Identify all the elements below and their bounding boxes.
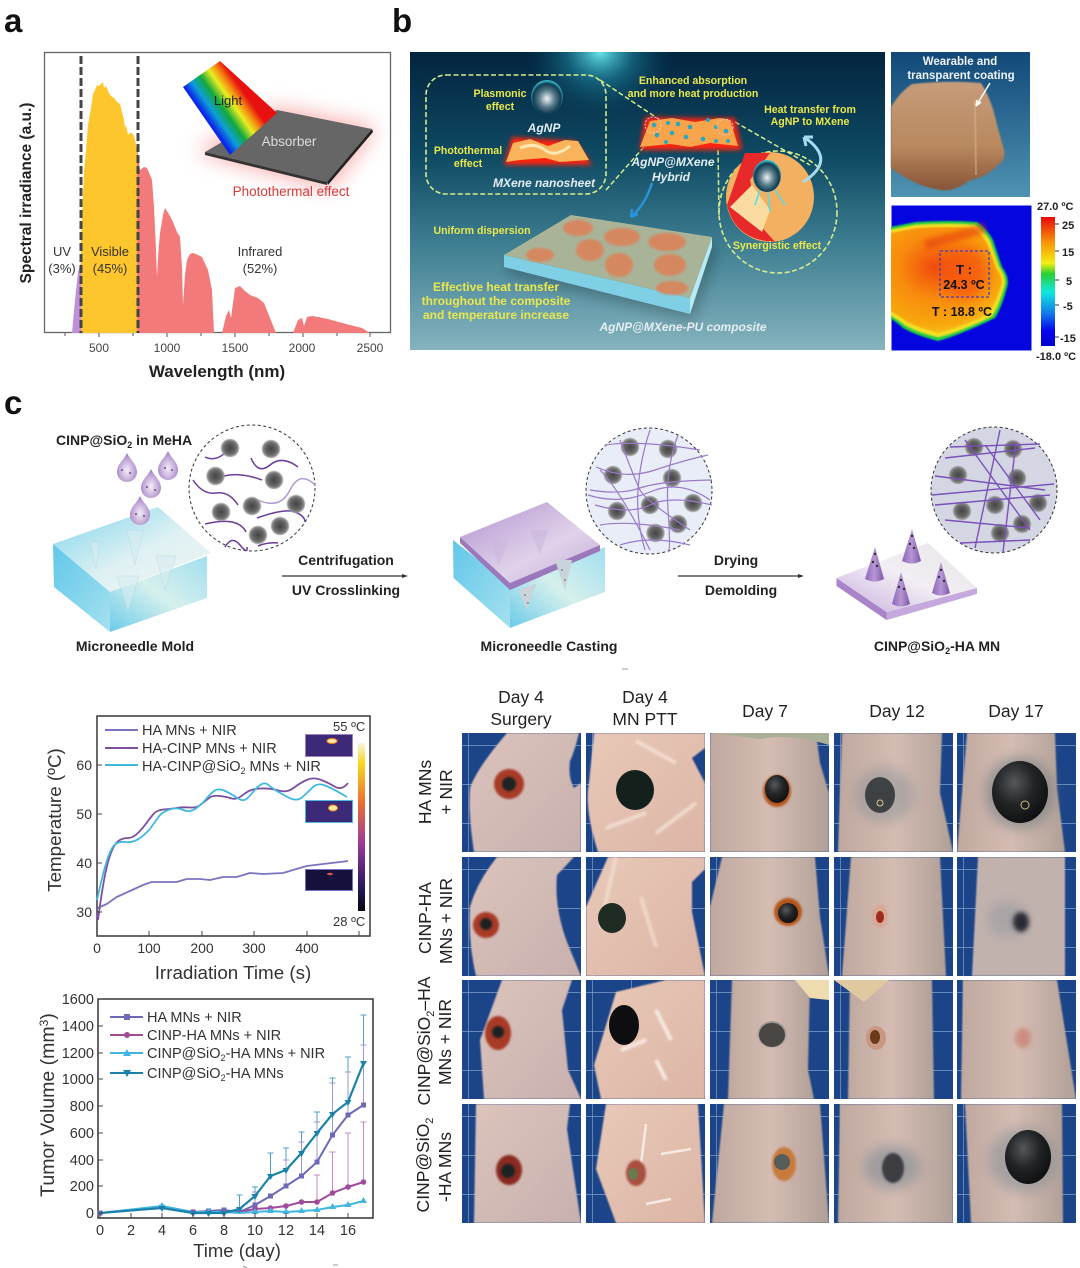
label: Microneedle Casting: Microneedle Casting xyxy=(481,638,617,654)
axis ticks: 2 xyxy=(127,1223,135,1239)
photo: wearable coating on hand xyxy=(891,52,1030,197)
legend: MNs + NIR xyxy=(246,759,321,775)
x axis ticks and labels xyxy=(65,333,384,355)
legend: 2 xyxy=(241,766,246,776)
photo: row 3, MN PTT xyxy=(586,980,705,1099)
axis ticks: 40 xyxy=(76,855,92,871)
composite slab xyxy=(504,215,716,322)
thermal colorbar: 27.0 ºC xyxy=(1037,201,1073,213)
x axis ticks and labels: 2500 xyxy=(357,341,384,355)
arrow: centrifugation: Centrifugation xyxy=(298,552,394,568)
annotation text: Heat transfer from xyxy=(764,104,856,116)
photo: row 4, day 7 xyxy=(710,1104,829,1223)
dashed wavelength boundaries xyxy=(81,56,138,333)
label: Microneedle Mold: Microneedle Mold xyxy=(76,638,194,654)
inset colorbar xyxy=(358,743,365,911)
photo: row 4, day 17 xyxy=(957,1104,1076,1223)
axis ticks: 50 xyxy=(76,806,92,822)
HA-CINP MNs curve xyxy=(97,778,348,920)
axis ticks: 800 xyxy=(70,1099,94,1115)
label: CINP@SiO2-HA MN: 2 xyxy=(945,646,950,656)
axis ticks: 0 xyxy=(86,1206,94,1222)
label: CINP@SiO2 in MeHA: 2 xyxy=(127,440,132,450)
band labels: (45%) xyxy=(93,261,127,276)
band labels: Visible xyxy=(91,244,129,259)
icon: AgNP sphere xyxy=(531,80,563,114)
axis ticks: 1000 xyxy=(62,1072,94,1088)
row labels: treatment groups: –HA xyxy=(414,976,434,1011)
band labels xyxy=(48,244,282,276)
x axis ticks and labels: 1500 xyxy=(222,341,249,355)
photo: row 2, day 7 xyxy=(710,857,829,976)
y axis title: ) xyxy=(37,1013,59,1020)
photo: row 1, day 12 xyxy=(834,733,953,852)
error bars xyxy=(236,1015,366,1209)
inset: light on absorber photothermal xyxy=(183,61,376,199)
thermal colorbar xyxy=(1036,201,1076,363)
legend: HA MNs + NIR xyxy=(142,723,237,739)
photo: row 1, day 17 xyxy=(957,733,1076,852)
thermal colorbar: 5 xyxy=(1066,276,1072,288)
x axis ticks and labels: 2000 xyxy=(289,341,316,355)
thermal colorbar: 15 xyxy=(1062,247,1074,259)
y axis title: Spectral irradiance (a.u.) xyxy=(18,103,35,283)
photo: row 4, day 4 surgery xyxy=(462,1104,581,1223)
column headings: days: Day 12 xyxy=(869,701,925,721)
inset: light on absorber photothermal: Photothermal effect xyxy=(233,184,350,199)
axis ticks: 0 xyxy=(93,940,101,956)
panel b: AgNP@MXene composite schematic: MXene nanosheet xyxy=(493,176,596,190)
row labels: treatment groups: HA MNs xyxy=(415,760,435,824)
panel b: AgNP@MXene composite schematic: AgNP@MXene xyxy=(630,155,715,169)
row labels: treatment groups: CINP@SiO xyxy=(413,1124,433,1212)
annotation text xyxy=(422,75,856,322)
panel b: AgNP@MXene composite schematic: AgNP@MXene-PU composite xyxy=(598,320,767,334)
photo grid: tumor wounds xyxy=(462,733,1076,1223)
y axis title: 3 xyxy=(37,1019,51,1026)
thermal image: 24.3 ºC xyxy=(943,278,985,292)
band labels: (52%) xyxy=(243,261,277,276)
axis ticks: 300 xyxy=(242,940,266,956)
axis ticks: 400 xyxy=(70,1153,94,1169)
photo: row 2, day 17 xyxy=(957,857,1076,976)
photo: wearable coating on hand: transparent coating xyxy=(907,70,1015,82)
annotation text: AgNP to MXene xyxy=(771,116,849,128)
annotation text: Synergistic effect xyxy=(733,240,822,252)
axis ticks: 16 xyxy=(340,1223,356,1239)
row labels: treatment groups: 2 xyxy=(424,1118,436,1124)
annotation text: Enhanced absorption xyxy=(639,75,747,87)
arrow: hybrid to composite xyxy=(631,183,652,217)
column headings: days: MN PTT xyxy=(612,709,678,729)
legend: 2 xyxy=(221,1053,226,1063)
axis ticks: 10 xyxy=(247,1223,263,1239)
panel letter b: b xyxy=(392,2,412,39)
annotation text: and temperature increase xyxy=(423,308,569,322)
arrow: drying: Demolding xyxy=(705,582,777,598)
photo: wearable coating on hand: Wearable and xyxy=(923,56,997,68)
arrow: drying xyxy=(678,552,804,598)
panel b: AgNP@MXene composite schematic: Hybrid xyxy=(652,170,691,184)
column headings: days: Day 4 xyxy=(498,687,544,707)
axis ticks xyxy=(76,757,359,956)
chart: temperature vs irradiation time: 55 ºC xyxy=(333,719,365,734)
annotation text: effect xyxy=(454,158,483,170)
annotation text: effect xyxy=(486,101,515,113)
panel b: AgNP@MXene composite schematic: AgNP xyxy=(527,121,561,135)
thermal colorbar: -15 xyxy=(1060,333,1076,345)
legend: HA-CINP MNs + NIR xyxy=(142,741,277,757)
column headings: days: Day 7 xyxy=(742,701,788,721)
photo: row 1, day 4 surgery xyxy=(462,733,581,852)
axis ticks: 200 xyxy=(70,1179,94,1195)
legend: -HA MNs xyxy=(226,1066,284,1082)
CINP@SiO2-HA microneedle patch xyxy=(836,529,977,620)
photo: row 3, day 7 xyxy=(710,980,829,1099)
row labels: treatment groups xyxy=(413,760,456,1212)
photo: row 2, day 12 xyxy=(834,857,953,976)
column headings: days: Day 17 xyxy=(988,701,1044,721)
thermal image xyxy=(880,206,1032,350)
arrow: centrifugation xyxy=(282,552,408,598)
axis ticks: 6 xyxy=(189,1223,197,1239)
legend: CINP-HA MNs + NIR xyxy=(147,1028,281,1044)
axis ticks: 1200 xyxy=(62,1046,94,1062)
band labels: (3%) xyxy=(48,261,76,276)
HA MNs curve xyxy=(98,861,348,908)
annotation text: Effective heat transfer xyxy=(433,280,559,294)
curved heat-transfer arrow xyxy=(803,137,821,182)
visible band xyxy=(81,82,137,333)
x axis ticks and labels: 1000 xyxy=(154,341,181,355)
microneedle mold xyxy=(53,507,211,632)
thermal image insets xyxy=(306,734,352,890)
panel b: AgNP@MXene composite schematic xyxy=(410,0,885,350)
annotation text: throughout the composite xyxy=(422,294,571,308)
legend: -HA MNs + NIR xyxy=(226,1046,325,1062)
row labels: treatment groups: -HA MNs xyxy=(435,1132,455,1202)
legend: CINP@SiO xyxy=(147,1066,221,1082)
legend: CINP@SiO xyxy=(147,1046,221,1062)
droplets xyxy=(117,451,178,525)
magnified circle: dried network xyxy=(931,427,1057,553)
x axis title: Irradiation Time (s) xyxy=(155,962,311,983)
photo: row 1, day 7 xyxy=(710,733,829,852)
axis ticks xyxy=(62,992,356,1239)
thermal colorbar: -5 xyxy=(1063,301,1073,313)
band labels: Infrared xyxy=(238,244,282,259)
thermal image: T : xyxy=(956,262,972,277)
panel letter a: a xyxy=(4,2,23,39)
row labels: treatment groups: MNs + NIR xyxy=(435,999,455,1085)
inset: light on absorber photothermal: Light xyxy=(214,93,242,108)
magnified circle: casting network xyxy=(586,428,712,554)
photo: row 4, MN PTT xyxy=(586,1104,705,1223)
axis ticks: 12 xyxy=(278,1223,294,1239)
axis ticks: 600 xyxy=(70,1126,94,1142)
axis ticks: 100 xyxy=(137,940,161,956)
photo: row 2, day 4 surgery xyxy=(462,857,581,976)
CINP@SiO2-HA MNs series xyxy=(100,1063,364,1213)
band labels: UV xyxy=(53,244,71,259)
CINP-HA MNs series xyxy=(100,1182,364,1213)
thermal image: T : 18.8 ºC xyxy=(932,305,992,319)
thermal colorbar: -18.0 ºC xyxy=(1036,351,1076,363)
y axis title: Temperature (ºC) xyxy=(44,748,65,892)
annotation text: Photothermal xyxy=(434,145,502,157)
axis ticks: 200 xyxy=(190,940,214,956)
axis ticks: 14 xyxy=(309,1223,325,1239)
photo: row 3, day 12 xyxy=(834,980,953,1099)
axis ticks: 1400 xyxy=(62,1019,94,1035)
annotation text: Plasmonic xyxy=(474,88,527,100)
legend xyxy=(110,1010,325,1083)
axis ticks: 8 xyxy=(220,1223,228,1239)
annotation text: and more heat production xyxy=(628,88,758,100)
row labels: treatment groups: 2 xyxy=(425,1011,437,1017)
row labels: treatment groups: + NIR xyxy=(436,769,456,815)
row labels: treatment groups: CINP-HA xyxy=(415,882,435,954)
photo: row 4, day 12 xyxy=(834,1104,953,1223)
axis ticks: 60 xyxy=(76,757,92,773)
x axis title: Time (day) xyxy=(193,1240,281,1261)
label: CINP@SiO2 in MeHA: in MeHA xyxy=(132,432,192,448)
dashed inset box xyxy=(426,75,606,194)
arrow: drying: Drying xyxy=(714,552,758,568)
legend: HA-CINP@SiO xyxy=(142,759,241,775)
magnified circle: precursor nanoparticles xyxy=(189,425,315,551)
row labels: treatment groups: CINP@SiO xyxy=(414,1017,434,1105)
legend: 2 xyxy=(221,1073,226,1083)
annotation text: Uniform dispersion xyxy=(433,225,531,237)
HA-CINP@SiO2 MNs curve xyxy=(97,783,347,900)
axis ticks: 1600 xyxy=(62,992,94,1008)
photo: row 3, day 4 surgery xyxy=(462,980,581,1099)
arrow: centrifugation: UV Crosslinking xyxy=(292,582,400,598)
chart: temperature vs irradiation time xyxy=(44,716,370,983)
UV band xyxy=(72,262,81,333)
CINP@SiO2-HA MNs + NIR series xyxy=(100,1201,364,1213)
axis ticks: 400 xyxy=(295,940,319,956)
column headings: days: Day 4 xyxy=(622,687,668,707)
photo: row 1, MN PTT xyxy=(586,733,705,852)
photo: row 2, MN PTT xyxy=(586,857,705,976)
infrared band xyxy=(137,147,370,333)
axis ticks: 30 xyxy=(76,904,92,920)
synergistic circle inset xyxy=(719,151,837,273)
HA MNs series xyxy=(100,1105,364,1213)
axis ticks: 0 xyxy=(96,1223,104,1239)
icon: AgNP@MXene hybrid sheet xyxy=(640,117,742,150)
y axis title: Tumor Volume (mm xyxy=(37,1026,59,1197)
label: CINP@SiO2-HA MN: CINP@SiO xyxy=(874,638,945,654)
x axis ticks and labels: 500 xyxy=(89,341,109,355)
chart: temperature vs irradiation time: 28 ºC xyxy=(333,914,365,929)
legend: HA MNs + NIR xyxy=(147,1010,242,1026)
inset: light on absorber photothermal: Absorber xyxy=(262,134,317,149)
microneedle casting xyxy=(453,502,605,628)
column headings: days xyxy=(490,687,1044,729)
label: CINP@SiO2 in MeHA: CINP@SiO xyxy=(56,432,127,448)
x axis title: Wavelength (nm) xyxy=(149,362,285,381)
row labels: treatment groups: MNs + NIR xyxy=(436,878,456,964)
column headings: days: Surgery xyxy=(490,709,552,729)
photo: row 3, day 17 xyxy=(957,980,1076,1099)
legend xyxy=(105,723,321,776)
label: CINP@SiO2-HA MN: -HA MN xyxy=(950,638,1000,654)
panel letter c: c xyxy=(4,384,22,421)
panel a: solar spectrum chart xyxy=(18,52,390,381)
axis ticks: 4 xyxy=(158,1223,166,1239)
chart: tumor volume over time xyxy=(37,992,373,1261)
thermal colorbar: 25 xyxy=(1062,220,1074,232)
icon: MXene nanosheet xyxy=(504,137,592,165)
